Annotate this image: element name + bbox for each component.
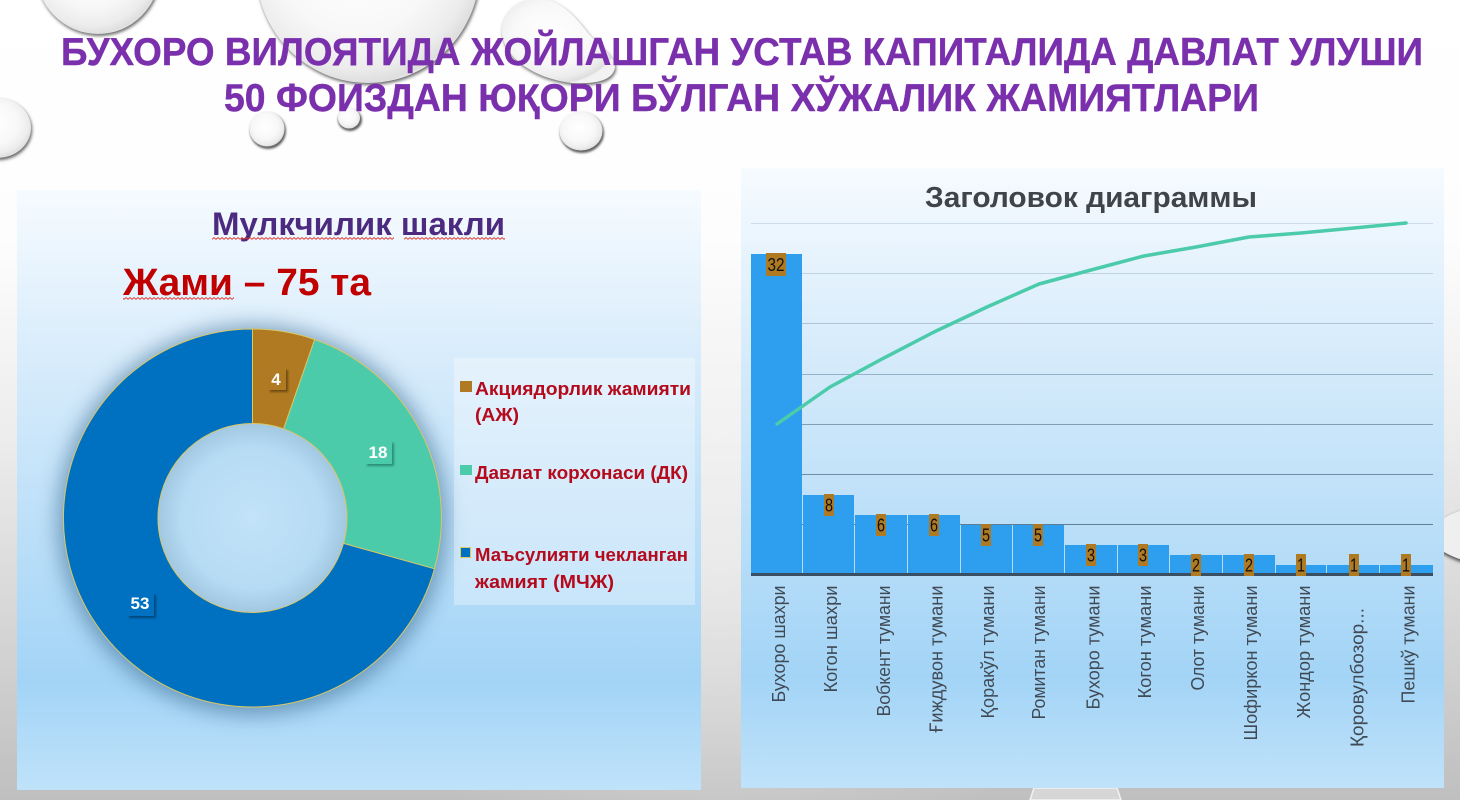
legend item: state enterprise: Давлат корхонаси (ДК): [475, 462, 688, 483]
bar value labels: 3: [1139, 546, 1147, 566]
category labels: Бухоро тумани: [1084, 586, 1104, 710]
bar value labels: 5: [982, 526, 990, 546]
data label: 18: 18: [369, 443, 387, 462]
category labels: Бухоро шахри: [769, 586, 789, 702]
title: БУХОРО ВИЛОЯТИДА ЖОЙЛАШГАН УСТАВ КАПИТАЛИДА ДАВЛАТ УЛУШИ: [61, 29, 1423, 74]
category labels: Ғиждувон тумани: [926, 586, 946, 734]
legend item: limited liability: Маъсулияти чекланган: [475, 544, 688, 565]
category labels: Пешкў тумани: [1398, 586, 1418, 704]
bar value labels: 32: [768, 255, 784, 275]
data label: 4: [268, 368, 288, 392]
title: 50 ФОИЗДАН ЮҚОРИ БЎЛГАН ХЎЖАЛИК ЖАМИЯТЛАРИ: [224, 75, 1259, 120]
horizontal axis: [751, 573, 1433, 576]
category labels: Шофиркон тумани: [1241, 586, 1261, 740]
legend item: limited liability: жамият (МЧЖ): [474, 571, 614, 592]
category labels: Қоракўл тумани: [978, 586, 998, 718]
category labels: Қоровулбозор...: [1348, 608, 1368, 747]
category labels: Когон тумани: [1135, 586, 1155, 699]
bar value labels: 5: [1034, 526, 1042, 546]
legend: [454, 358, 695, 605]
bar value labels: 3: [1087, 546, 1095, 566]
cumulative line: [777, 223, 1406, 424]
legend item: joint stock: Акциядорлик жамияти: [475, 378, 691, 399]
category labels: Когон шахри: [821, 586, 841, 693]
bar value labels: 8: [825, 496, 833, 516]
bar value labels: 6: [930, 516, 938, 536]
total count: Жами – 75 та: [122, 262, 372, 304]
bar value labels: 2: [1192, 556, 1200, 576]
bar value labels: [766, 253, 1411, 576]
chart title: Заголовок диаграммы: [925, 182, 1257, 214]
title: [61, 29, 1423, 120]
legend item: joint stock: (АЖ): [475, 404, 519, 425]
segment: joint stock 4: [252, 329, 315, 429]
data label: 18: [365, 441, 394, 466]
bars: [751, 254, 1433, 574]
bar value labels: 1: [1402, 556, 1410, 576]
bar value labels: 6: [877, 516, 885, 536]
segment: state enterprise 18: [284, 340, 441, 569]
data label: 53: 53: [131, 594, 149, 613]
panel: districts pareto chart: [741, 168, 1444, 788]
data label: 53: [127, 593, 156, 618]
bar value labels: 2: [1245, 556, 1253, 576]
category labels: Олот тумани: [1188, 586, 1208, 690]
data label: 4: 4: [271, 370, 281, 389]
category labels: Жондор тумани: [1294, 586, 1314, 718]
donut chart: [58, 325, 448, 715]
bar value labels: 1: [1297, 556, 1305, 576]
category labels: Вобкент тумани: [874, 586, 894, 716]
segment: limited liability 53: [63, 329, 435, 707]
legend item: limited liability: [460, 544, 688, 592]
panel: ownership donut chart: [17, 190, 701, 790]
category labels: Ромитан тумани: [1029, 586, 1049, 720]
category labels: [769, 586, 1418, 747]
heading: ownership form: Мулкчилик шакли: [212, 206, 505, 242]
bar value labels: 1: [1350, 556, 1358, 576]
legend item: joint stock: [460, 378, 691, 425]
